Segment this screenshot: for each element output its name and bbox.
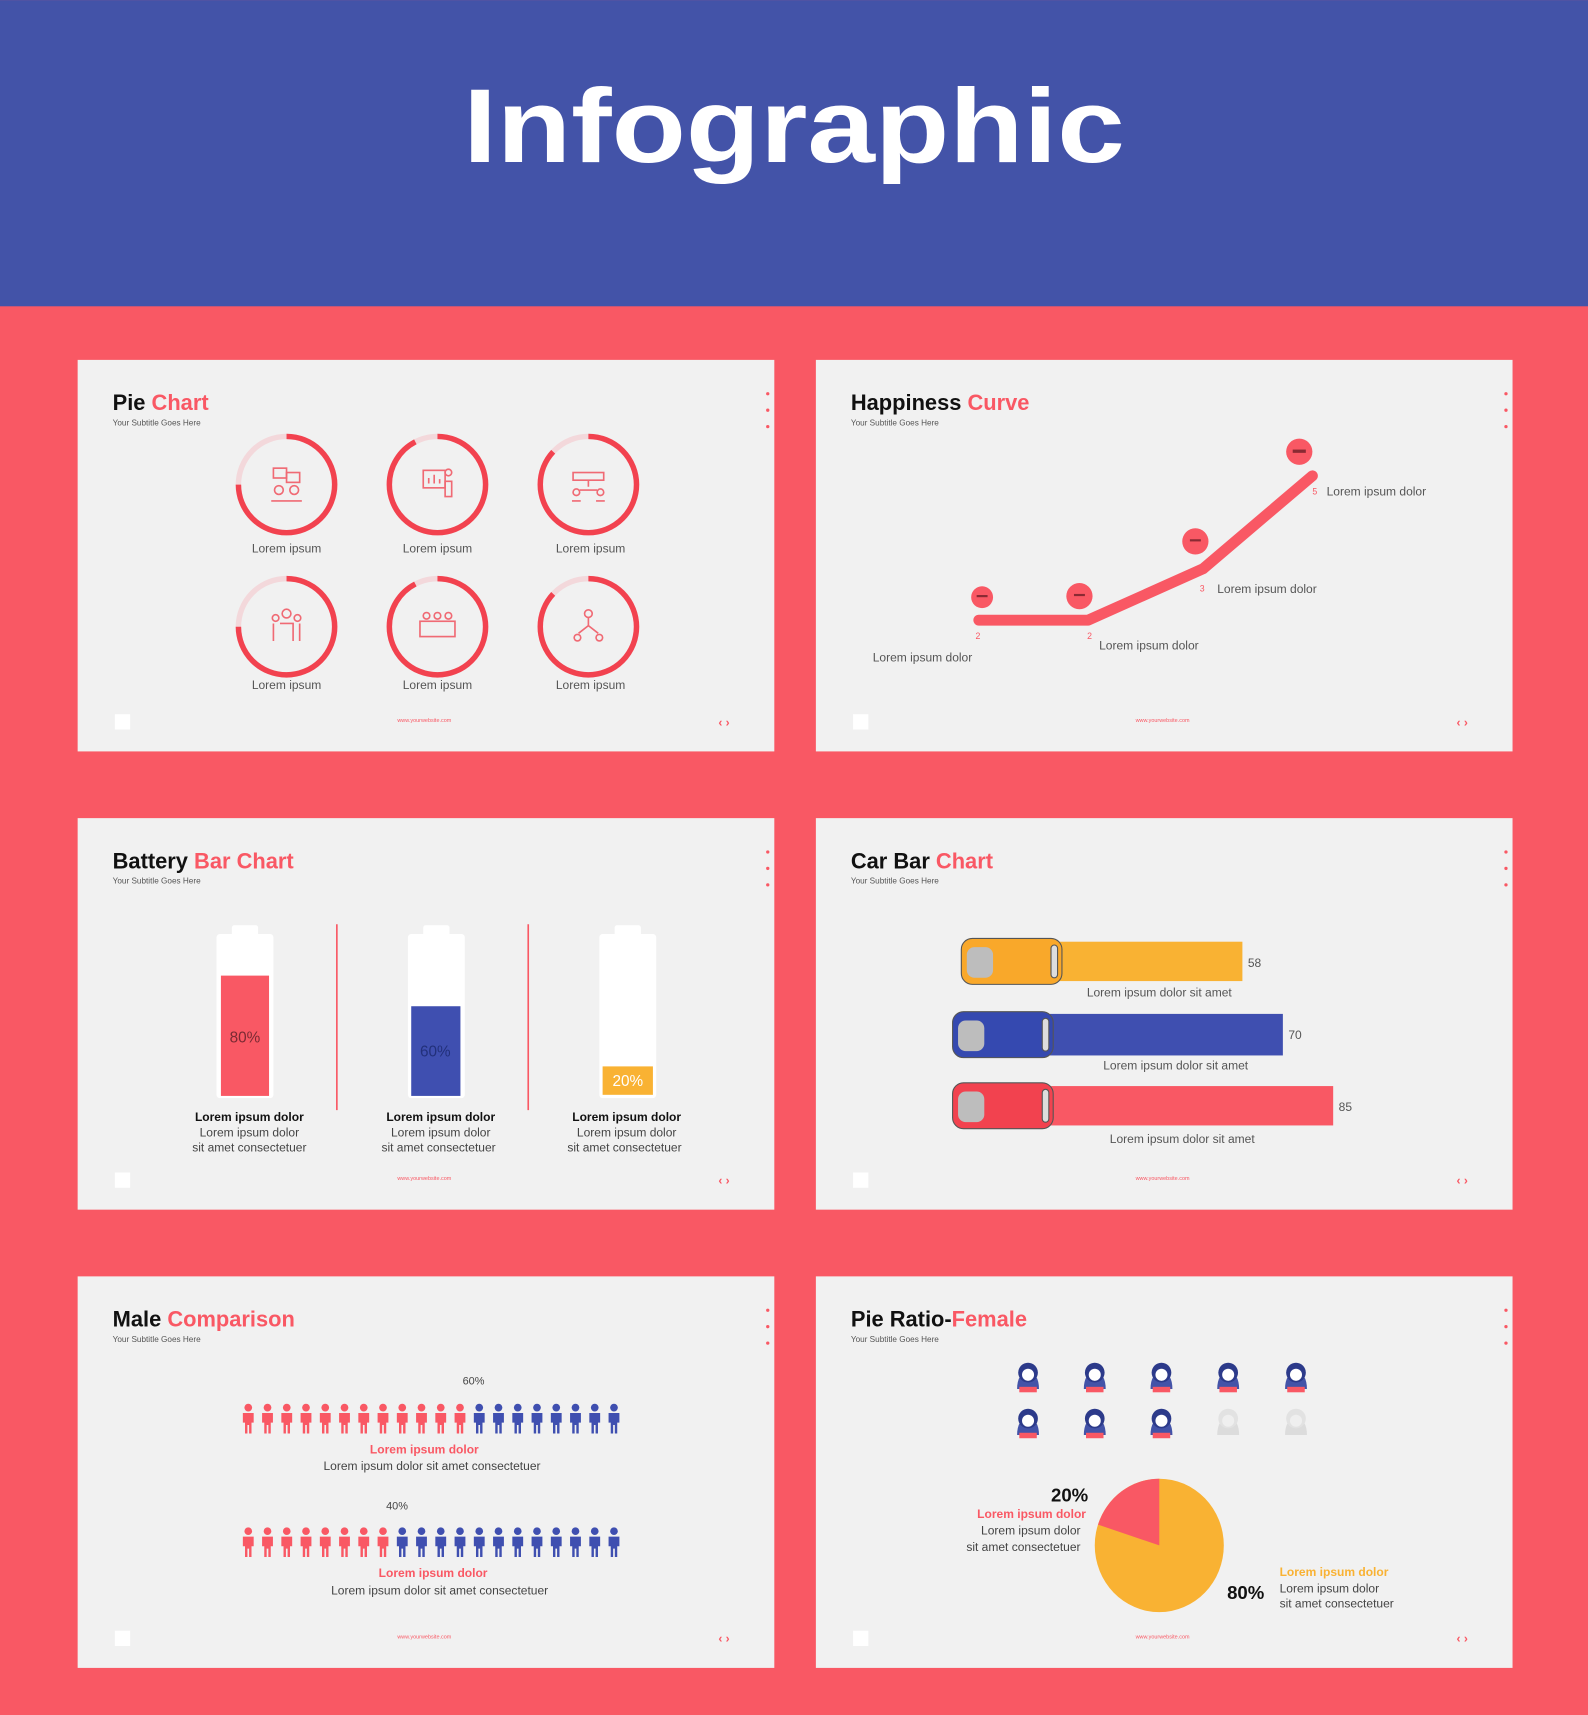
- heading: happiness curve: Happiness Curve: [851, 390, 1029, 415]
- panel: happiness curve: Lorem ipsum dolor: [1217, 582, 1317, 596]
- male labels: [323, 1376, 548, 1598]
- panel: battery bar chart: Your Subtitle Goes Here: [113, 877, 201, 886]
- donut rings: [238, 436, 637, 675]
- icons in rings: [271, 468, 605, 641]
- car values & labels: [1087, 956, 1352, 1146]
- ring labels: Lorem ipsum: [403, 541, 472, 555]
- title: Infographic: [463, 68, 1125, 185]
- panel: battery bar chart: www.yourwebsite.com: [396, 1176, 452, 1182]
- face markers: [971, 439, 1312, 609]
- panel: battery bar chart: [78, 818, 774, 1210]
- male labels: 40%: [386, 1500, 408, 1512]
- panel: happiness curve: ‹ ›: [1457, 715, 1468, 729]
- panel: pie chart: Your Subtitle Goes Here: [113, 419, 201, 428]
- battery labels: Lorem ipsum dolor: [195, 1110, 304, 1124]
- pie labels: Lorem ipsum dolor: [1280, 1581, 1379, 1595]
- car values & labels: 85: [1339, 1100, 1352, 1114]
- heading: male: Male Comparison: [113, 1307, 295, 1332]
- panel: male comparison: [78, 1276, 774, 1668]
- curve labels: 3: [1200, 584, 1205, 594]
- panel: car bar chart: Your Subtitle Goes Here: [851, 877, 939, 886]
- battery labels: sit amet consectetuer: [567, 1141, 682, 1155]
- battery labels: sit amet consectetuer: [381, 1141, 496, 1155]
- curve labels: [976, 486, 1317, 641]
- battery labels: [192, 1110, 682, 1155]
- heading: battery: Battery Bar Chart: [113, 848, 294, 873]
- male labels: Lorem ipsum dolor: [370, 1443, 479, 1457]
- male labels: Lorem ipsum dolor sit amet consectetuer: [331, 1584, 548, 1598]
- row 1 figures: [243, 1404, 619, 1433]
- panel: pie ratio female: [816, 1276, 1513, 1668]
- panel: car bar chart: ‹ ›: [1457, 1174, 1468, 1188]
- panel: happiness curve: Lorem ipsum dolor: [1327, 484, 1426, 498]
- panel: male comparison: www.yourwebsite.com: [396, 1634, 452, 1640]
- battery labels: Lorem ipsum dolor: [572, 1110, 681, 1124]
- panel: pie ratio female: www.yourwebsite.com: [1135, 1634, 1190, 1640]
- battery labels: Lorem ipsum dolor: [391, 1125, 491, 1139]
- dividers: [337, 924, 528, 1110]
- panel: happiness curve: Lorem ipsum dolor: [1099, 639, 1199, 653]
- battery labels: Lorem ipsum dolor: [200, 1125, 299, 1139]
- car values & labels: 58: [1248, 956, 1262, 970]
- panel: happiness curve: Your Subtitle Goes Here: [851, 419, 939, 428]
- heading: female: Pie Ratio-Female: [851, 1307, 1027, 1332]
- panel: battery bar chart: ‹ ›: [718, 1174, 730, 1188]
- cars: [953, 938, 1062, 1129]
- batteries: [217, 925, 656, 1098]
- pie labels: Lorem ipsum dolor: [1280, 1565, 1389, 1579]
- pie labels: 80%: [1227, 1582, 1265, 1603]
- battery labels: sit amet consectetuer: [192, 1141, 306, 1155]
- panel: pie chart: [78, 360, 774, 751]
- ring labels: Lorem ipsum: [556, 541, 625, 555]
- panel: car bar chart: [816, 818, 1513, 1210]
- heading: car: Car Bar Chart: [851, 848, 994, 873]
- ring labels: Lorem ipsum: [252, 678, 321, 692]
- curve labels: 5: [1312, 486, 1317, 496]
- male labels: Lorem ipsum dolor sit amet consectetuer: [323, 1459, 541, 1473]
- panel: male comparison: Your Subtitle Goes Here: [113, 1335, 201, 1344]
- panel: happiness curve: [816, 360, 1513, 751]
- panel: happiness curve: www.yourwebsite.com: [1135, 718, 1190, 724]
- car values & labels: Lorem ipsum dolor sit amet: [1103, 1059, 1249, 1073]
- curve line: [979, 476, 1312, 620]
- pie labels: sit amet consectetuer: [966, 1540, 1081, 1554]
- car values & labels: Lorem ipsum dolor sit amet: [1110, 1132, 1255, 1146]
- panel: male comparison: ‹ ›: [718, 1632, 730, 1646]
- ring labels: [252, 541, 625, 692]
- panel: car bar chart: www.yourwebsite.com: [1135, 1176, 1190, 1182]
- female icons: [1017, 1363, 1307, 1438]
- heading: pie chart: Pie Chart: [113, 390, 209, 415]
- ring labels: Lorem ipsum: [556, 678, 625, 692]
- battery labels: Lorem ipsum dolor: [577, 1125, 676, 1139]
- panel: battery bar chart: 20%: [612, 1073, 643, 1090]
- car values & labels: Lorem ipsum dolor sit amet: [1087, 985, 1232, 999]
- ring labels: Lorem ipsum: [403, 678, 472, 692]
- pie labels: Lorem ipsum dolor: [981, 1523, 1081, 1537]
- panel: pie ratio female: Your Subtitle Goes Here: [851, 1335, 939, 1344]
- panel: battery bar chart: 60%: [420, 1044, 451, 1061]
- pie labels: [966, 1485, 1394, 1611]
- pie labels: 20%: [1051, 1485, 1089, 1506]
- pie labels: sit amet consectetuer: [1280, 1597, 1394, 1611]
- pie chart: [1095, 1479, 1224, 1612]
- male labels: Lorem ipsum dolor: [379, 1566, 488, 1580]
- row 2 figures: [243, 1527, 619, 1557]
- bars: [1017, 942, 1242, 981]
- car values & labels: 70: [1288, 1028, 1302, 1042]
- pie labels: Lorem ipsum dolor: [977, 1507, 1086, 1521]
- panel: pie ratio female: ‹ ›: [1457, 1632, 1468, 1646]
- panel: happiness curve: Lorem ipsum dolor: [873, 651, 972, 665]
- header band: [0, 0, 1588, 306]
- panel: battery bar chart: 80%: [230, 1029, 261, 1046]
- battery labels: Lorem ipsum dolor: [386, 1110, 495, 1124]
- panel: pie chart: ‹ ›: [718, 715, 730, 729]
- ring labels: Lorem ipsum: [252, 541, 321, 555]
- male labels: 60%: [463, 1376, 485, 1388]
- curve labels: 2: [1087, 631, 1092, 641]
- panel: pie chart: www.yourwebsite.com: [396, 718, 452, 724]
- curve labels: 2: [976, 631, 981, 641]
